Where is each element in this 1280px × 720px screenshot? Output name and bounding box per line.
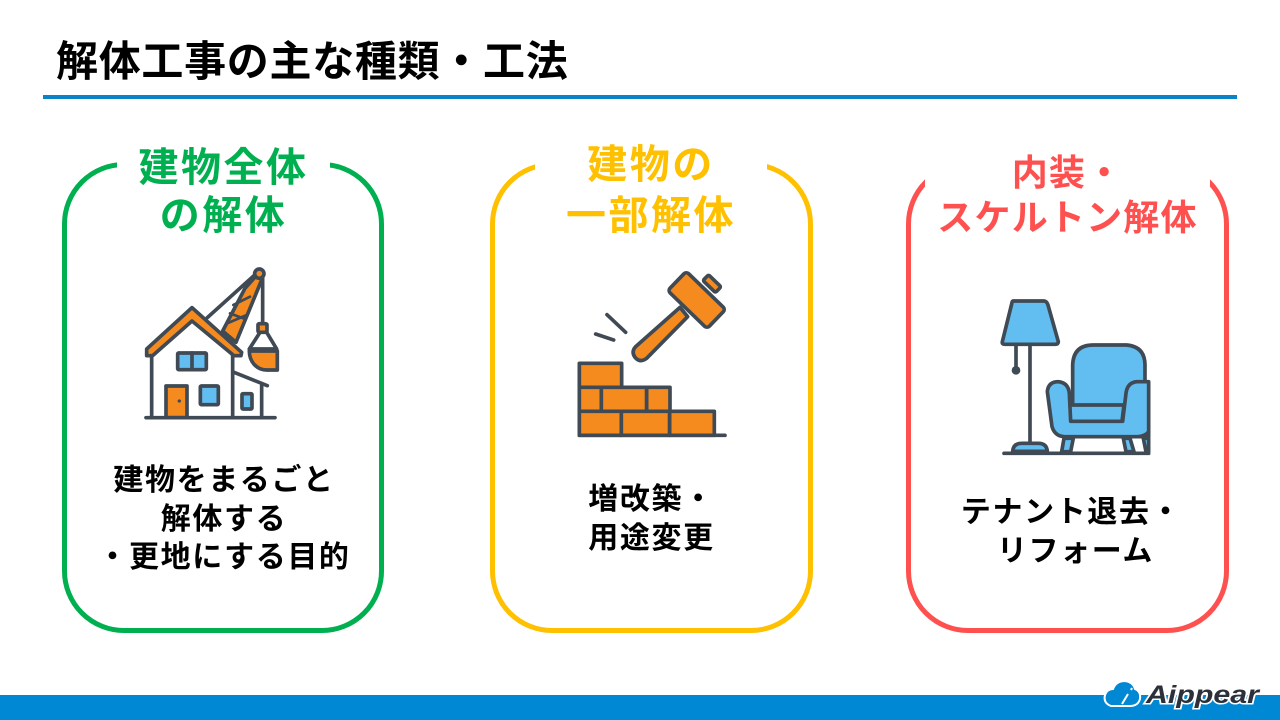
panel: interior and skeleton demolition xyxy=(906,152,1229,633)
panel heading text: 内装・ xyxy=(1012,152,1123,193)
panel description: ・更地にする目的 xyxy=(97,541,351,574)
panel heading: 建物の xyxy=(587,143,715,187)
panel description xyxy=(961,496,1182,568)
panel description xyxy=(97,464,351,574)
panel heading: 建物全体 xyxy=(138,146,308,190)
panel: partial demolition xyxy=(490,143,813,633)
panel description xyxy=(588,483,715,555)
logo wordmark: Aippear xyxy=(1145,681,1261,709)
panel: whole building demolition xyxy=(62,146,384,633)
panel description: 用途変更 xyxy=(588,522,715,555)
panel outline xyxy=(62,162,384,633)
panel heading: 一部解体 xyxy=(566,194,736,238)
panel description: テナント退去・ xyxy=(961,496,1182,529)
title: 解体工事の主な種類・工法 xyxy=(56,38,568,85)
panel outline xyxy=(490,162,813,633)
panel description: 解体する xyxy=(161,502,287,536)
panel heading xyxy=(535,140,767,242)
panel description: 建物をまるごと xyxy=(113,464,335,497)
icon: cloud xyxy=(1105,681,1140,706)
panel heading text: スケルトン解体 xyxy=(937,197,1198,238)
panel heading xyxy=(117,144,330,240)
panel heading text xyxy=(937,152,1198,238)
footer bar xyxy=(0,695,1280,720)
panel outline xyxy=(906,162,1229,633)
panel heading mask xyxy=(925,150,1210,200)
panel heading: の解体 xyxy=(160,194,287,238)
title underline xyxy=(43,95,1237,99)
panel description: リフォーム xyxy=(997,535,1154,568)
panel description: 増改築・ xyxy=(588,483,715,516)
